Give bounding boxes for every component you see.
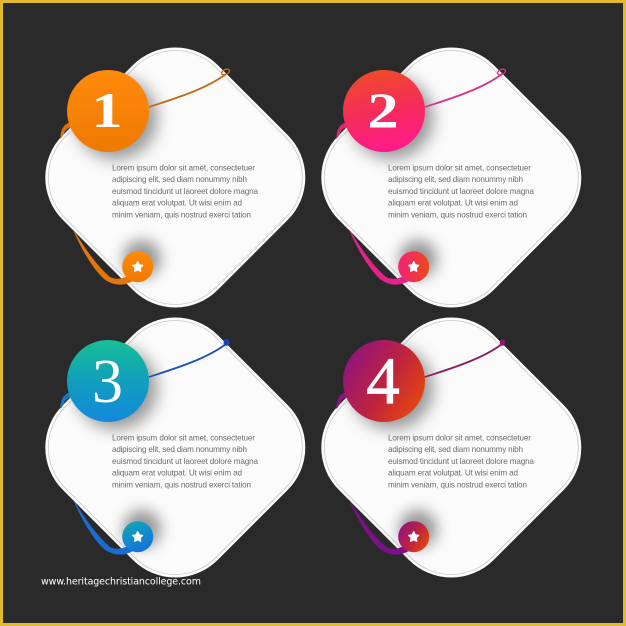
small star badge	[122, 521, 153, 552]
panel 2 diamond card	[296, 23, 606, 332]
body text: minim veniam, quis nostrud exerci tation	[388, 210, 527, 219]
lower tail	[73, 229, 133, 285]
body text: minim veniam, quis nostrud exerci tation	[112, 210, 251, 219]
panel 1 diamond card	[20, 23, 330, 332]
body text: euismod tincidunt ut laoreet dolore magna	[388, 457, 534, 466]
connector line to top right	[425, 340, 505, 377]
left swoosh	[336, 392, 348, 409]
left swoosh	[336, 122, 348, 139]
body text: adipiscing elit, sed diam nonummy nibh	[388, 175, 523, 184]
panel: step 1	[45, 48, 306, 308]
left swoosh	[60, 392, 72, 409]
body text: Lorem ipsum dolor sit amet, consectetuer	[112, 434, 255, 442]
number badge 2: 2	[367, 84, 399, 138]
small star badge	[398, 521, 429, 552]
body text: minim veniam, quis nostrud exerci tation	[388, 480, 527, 489]
body text: euismod tincidunt ut laoreet dolore magna	[112, 457, 258, 466]
panel 1 shadows	[75, 77, 161, 278]
number badge 4: 4	[366, 344, 400, 418]
body text: Lorem ipsum dolor sit amet, consectetuer	[112, 164, 255, 172]
panel 2 shadows	[351, 77, 437, 278]
panel 4 shadows	[351, 347, 437, 548]
body text: aliquam erat volutpat. Ut wisi enim ad	[112, 199, 242, 208]
lower tail	[73, 499, 133, 555]
small star badge	[398, 251, 429, 282]
body text: minim veniam, quis nostrud exerci tation	[112, 480, 251, 489]
connector line to top right	[425, 68, 506, 107]
panel 3 shadows	[75, 347, 161, 548]
body text: euismod tincidunt ut laoreet dolore magna	[112, 187, 258, 196]
body text: Lorem ipsum dolor sit amet, consectetuer	[388, 434, 531, 442]
number badge 2	[343, 70, 425, 152]
lower tail	[349, 229, 409, 285]
panel 3 diamond card	[20, 293, 330, 602]
body text: Lorem ipsum dolor sit amet, consectetuer	[388, 164, 531, 172]
panel: step 2	[321, 48, 582, 308]
small star badge	[122, 251, 153, 282]
panel 4 diamond card	[296, 293, 606, 602]
body text: aliquam erat volutpat. Ut wisi enim ad	[388, 469, 518, 478]
body text: adipiscing elit, sed diam nonummy nibh	[388, 445, 523, 454]
number badge 3	[67, 340, 149, 422]
connector line to top right	[149, 340, 229, 377]
body text: aliquam erat volutpat. Ut wisi enim ad	[388, 199, 518, 208]
body text: adipiscing elit, sed diam nonummy nibh	[112, 175, 247, 184]
lower tail	[349, 499, 409, 555]
body text: aliquam erat volutpat. Ut wisi enim ad	[112, 469, 242, 478]
connector line to top right	[149, 68, 230, 107]
watermark: www.heritagechristiancollege.com	[41, 576, 201, 588]
number badge 3: 3	[92, 348, 123, 416]
body text: adipiscing elit, sed diam nonummy nibh	[112, 445, 247, 454]
number badge 1: 1	[91, 84, 123, 138]
panel: step 3	[45, 318, 306, 578]
body text: euismod tincidunt ut laoreet dolore magna	[388, 187, 534, 196]
number badge 4	[343, 340, 425, 422]
left swoosh	[60, 122, 72, 139]
number badge 1	[67, 70, 149, 152]
panel: step 4	[321, 318, 582, 578]
